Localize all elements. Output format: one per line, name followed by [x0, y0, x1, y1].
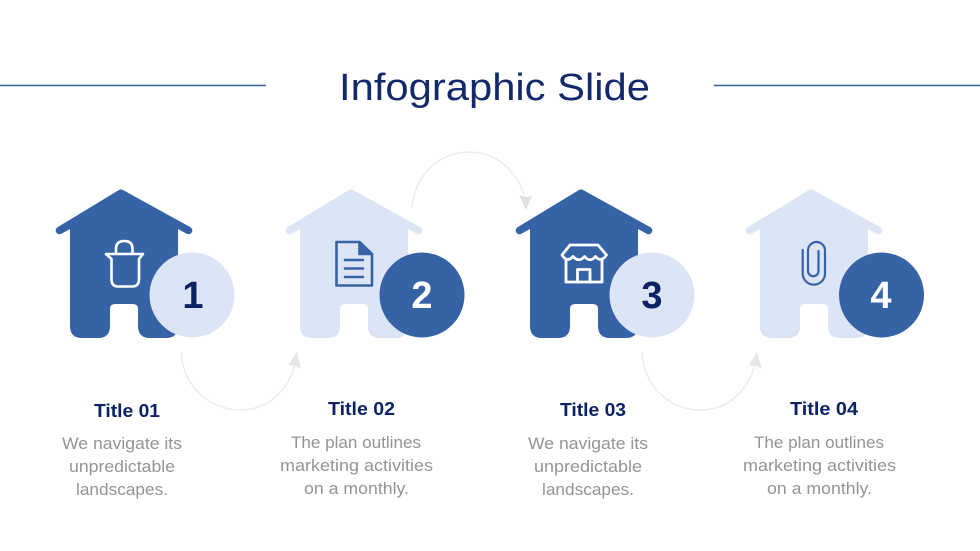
text: step 4 description: on a monthly. — [767, 479, 872, 498]
arrow: step 2 to step 3 — [412, 152, 532, 210]
panel: step 2 — [280, 189, 464, 498]
house 3 — [516, 189, 652, 338]
house 4 — [746, 189, 882, 338]
panel: step 3 — [516, 189, 694, 499]
text: step 3 description: unpredictable — [534, 457, 642, 476]
house 1 — [56, 189, 192, 338]
text: step 3 description — [528, 434, 648, 499]
number 2: 2 — [411, 275, 433, 317]
text: step 2 description: The plan outlines — [291, 433, 421, 452]
house 2 — [286, 189, 422, 338]
arrow: step 1 to step 2 — [181, 352, 301, 410]
text: step 4 description: The plan outlines — [754, 433, 884, 452]
text: step 4 description: marketing activities — [743, 456, 896, 475]
icon: shopping bag — [106, 241, 143, 286]
text: step 3 description: We navigate its — [528, 434, 648, 453]
icon: document — [336, 242, 372, 286]
number badge 2 — [380, 252, 464, 338]
text: step 2 description: on a monthly. — [304, 479, 409, 498]
text: step 2 description: marketing activities — [280, 456, 433, 475]
number 3: 3 — [641, 275, 663, 317]
text: step 1 description: unpredictable — [69, 457, 175, 476]
number badge 3 — [610, 252, 694, 338]
icon: storefront — [562, 245, 606, 282]
number 4: 4 — [870, 275, 892, 317]
text: step 4 description — [743, 433, 896, 498]
arrow: step 3 to step 4 — [642, 352, 762, 410]
text: step 3 description: landscapes. — [542, 480, 634, 499]
panel: step 4 — [743, 189, 924, 498]
icon: paperclip — [803, 242, 825, 285]
text: step 1 description: landscapes. — [76, 480, 168, 499]
heading: Title 02: Title 02 — [328, 399, 395, 419]
text: step 1 description — [62, 434, 182, 499]
number badge 4 — [839, 252, 924, 338]
text: step 1 description: We navigate its — [62, 434, 182, 453]
panel: step 1 — [56, 189, 235, 499]
heading: Title 04: Title 04 — [790, 399, 858, 419]
title: Infographic Slide — [339, 67, 650, 109]
number 1: 1 — [182, 275, 204, 317]
heading: Title 03: Title 03 — [560, 400, 626, 420]
text: step 2 description — [280, 433, 433, 498]
heading: Title 01: Title 01 — [94, 401, 160, 421]
number badge 1 — [150, 252, 234, 338]
